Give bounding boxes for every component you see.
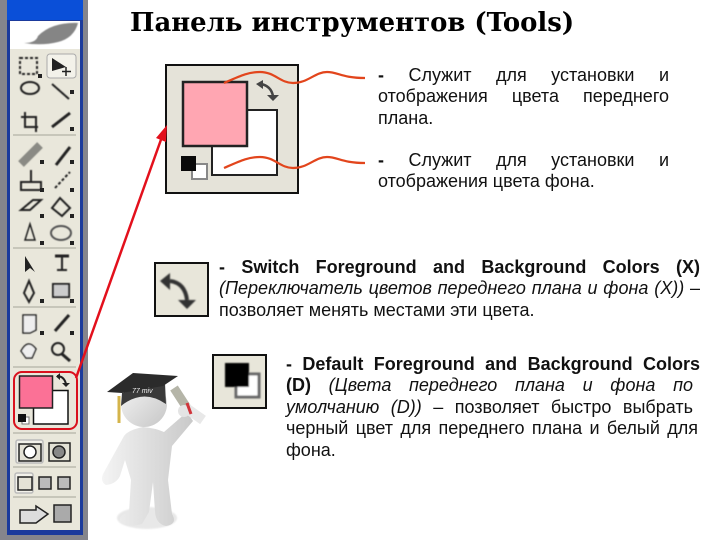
pointer: foreground callout line (224, 70, 365, 84)
text: foreground colour description (378, 65, 669, 128)
colour swatches (18, 373, 70, 424)
icon: large foreground/background colour swatch (165, 64, 299, 194)
text: foreground colour description: отображения цвета переднего (378, 86, 669, 106)
text: default colours description: черный цвет для переднего плана и белый для (286, 418, 698, 438)
text: default colours description: умолчанию (D)) – позволяет быстро выбрать (286, 397, 693, 417)
text: default colours description: - Default Foreground and Background Colors (286, 354, 700, 374)
icon: default colours swatch (212, 354, 267, 409)
text: default colours description (285, 354, 700, 460)
icon: switch colours arrows (154, 262, 209, 317)
text: background colour description: отображения цвета фона. (378, 171, 595, 191)
text: background colour description (378, 150, 669, 191)
text: default colours description: (D) (Цвета переднего плана и фона по (286, 375, 693, 395)
pointer: background callout line (224, 156, 365, 170)
text: default colours description: фона. (286, 440, 336, 460)
text: switch colours description (219, 257, 700, 320)
title: Панель инструментов (Tools) (130, 8, 574, 38)
text: foreground colour description: - Служит для установки и (378, 65, 669, 85)
illustration: graduate figure with diploma (102, 373, 206, 529)
text: switch colours description: (Переключатель цветов переднего плана и фона (X)) – (219, 278, 700, 298)
text: foreground colour description: плана. (378, 108, 433, 128)
illustration: graduate figure with diploma: 77 miv (132, 388, 153, 395)
text: switch colours description: позволяет менять местами эти цвета. (219, 300, 534, 320)
text: background colour description: - Служит для установки и (378, 150, 669, 170)
text: switch colours description: - Switch Foreground and Background Colors (X) (219, 257, 700, 277)
toolbar: Photoshop tools panel (0, 0, 88, 540)
